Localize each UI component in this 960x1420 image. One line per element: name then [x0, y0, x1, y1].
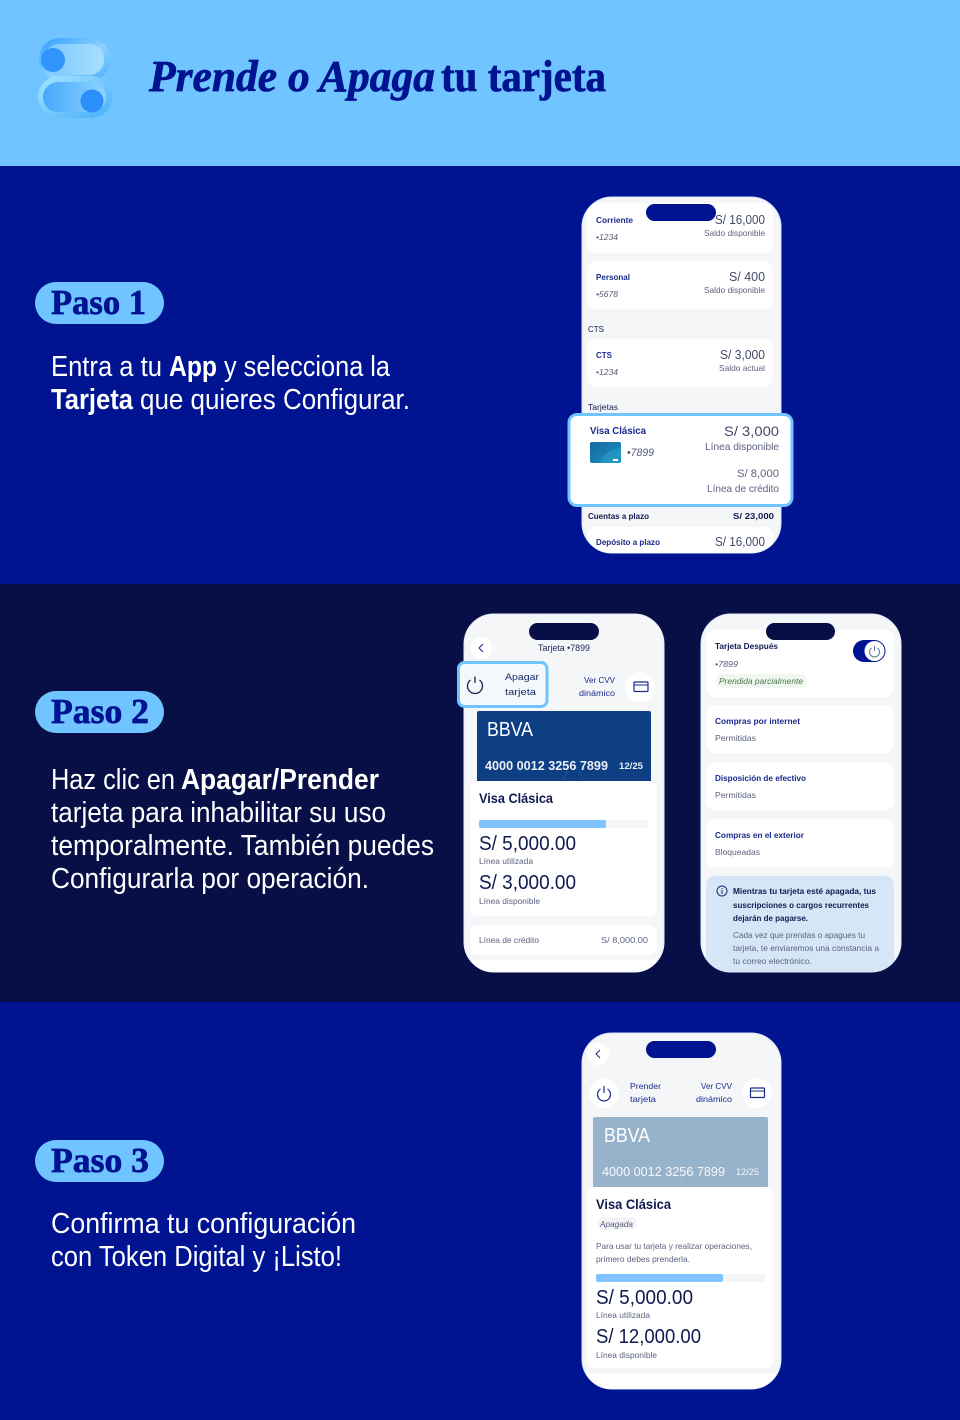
credit panel: Apagada	[599, 1220, 634, 1229]
title: tu tarjeta	[441, 52, 606, 101]
step 2 text: Apagar/Prender	[181, 764, 379, 796]
highlight: turn off card button	[458, 662, 547, 706]
setting: disposicion de efectivo: Disposición de efectivo	[715, 773, 806, 783]
credit panel: Línea utilizada	[596, 1310, 650, 1320]
step 2 text: Haz clic en	[51, 764, 175, 796]
bank card	[477, 711, 651, 783]
turn on button: Prender	[630, 1081, 661, 1091]
account: personal: Personal	[596, 272, 630, 282]
step 3 text: Confirma tu configuración	[51, 1208, 356, 1240]
row: cuentas a plazo: S/ 16,000	[715, 535, 765, 549]
card status: Prendida parcialmente	[719, 677, 804, 686]
CVV button: Ver CVV	[701, 1081, 732, 1091]
account: corriente: S/ 16,000	[715, 213, 765, 227]
highlight: selected card	[569, 414, 792, 506]
CVV button: dinámico	[579, 688, 615, 698]
icon: back	[587, 1043, 609, 1065]
setting: compras en el exterior: Bloqueadas	[715, 847, 760, 857]
step 2 text: temporalmente. También puedes	[51, 830, 434, 862]
toggle switch	[853, 640, 886, 662]
bank card: 4000 0012 3256 7899	[485, 759, 608, 773]
step 2 badge: Paso 2	[51, 692, 149, 731]
setting: compras en el exterior	[706, 819, 894, 867]
step 1 text: App	[169, 351, 217, 383]
credit line row: Línea de crédito	[479, 935, 539, 945]
phone: card off	[582, 1033, 781, 1390]
highlight: selected card: Visa Clásica	[590, 426, 646, 437]
step 1 text: Entra a tu	[51, 351, 162, 383]
row: cuentas a plazo: Cuentas a plazo	[588, 511, 649, 521]
highlight: selected card: Línea disponible	[705, 441, 779, 453]
setting: disposicion de efectivo: Permitidas	[715, 790, 756, 800]
setting: compras por internet	[706, 705, 894, 753]
phone: account list	[569, 197, 792, 567]
credit panel: Línea disponible	[596, 1350, 657, 1360]
credit panel	[587, 1187, 774, 1368]
callout: info notice: Cada vez que prendas o apagues tu	[733, 930, 865, 940]
phone: card detail: Tarjeta •7899	[538, 643, 590, 653]
account: CTS: Saldo actual	[719, 363, 765, 373]
credit panel: Visa Clásica	[596, 1197, 671, 1212]
icon: back	[470, 637, 492, 659]
highlight: turn off card button: Apagar	[505, 672, 539, 683]
account: personal: Saldo disponible	[704, 285, 765, 295]
highlight: selected card: S/ 8,000	[737, 468, 779, 480]
account: corriente: Corriente	[596, 215, 633, 225]
step 1 text: que quieres Configurar.	[140, 384, 410, 416]
phone: card settings	[701, 614, 901, 976]
account: CTS: •1234	[596, 368, 619, 377]
account: corriente: Saldo disponible	[704, 228, 765, 238]
account: CTS: CTS	[596, 350, 612, 360]
card status: Tarjeta Después	[715, 641, 778, 651]
step 3 badge: Paso 3	[51, 1141, 149, 1180]
credit panel: Línea disponible	[479, 896, 540, 906]
account: personal: •5678	[596, 290, 619, 299]
CVV button	[579, 672, 655, 702]
card status	[715, 641, 807, 688]
step 1 badge: Paso 1	[51, 283, 146, 322]
setting: compras por internet: Compras por internet	[715, 716, 800, 726]
setting: disposicion de efectivo	[706, 762, 894, 810]
credit panel: Línea utilizada	[479, 856, 533, 866]
title	[148, 52, 606, 101]
setting: compras en el exterior: Compras en el exterior	[715, 830, 805, 840]
credit panel	[470, 781, 657, 916]
callout: info notice: suscripciones o cargos recurrentes	[733, 900, 869, 910]
step 1 text	[51, 351, 410, 416]
credit line row	[479, 935, 648, 945]
account: CTS: CTS	[588, 324, 604, 334]
credit panel: primero debes prenderla.	[596, 1254, 690, 1264]
highlight: selected card: S/ 3,000	[724, 423, 779, 439]
CVV button: Ver CVV	[584, 675, 615, 685]
step 2 text	[51, 764, 434, 895]
step 2 badge	[35, 691, 164, 733]
row: cuentas a plazo: S/ 23,000	[733, 511, 774, 521]
phone: card detail	[458, 614, 664, 974]
panel: step 1	[35, 196, 794, 554]
account: corriente	[596, 213, 765, 242]
credit line row: S/ 8,000.00	[601, 935, 648, 945]
bank card: 12/25	[619, 761, 643, 771]
account: CTS: S/ 3,000	[720, 348, 765, 362]
panel: step 3	[35, 1032, 782, 1390]
bank card: disabled	[593, 1117, 768, 1189]
icon: toggle switches	[38, 38, 112, 118]
step 1 text: Tarjeta	[51, 384, 134, 416]
step 3 badge	[35, 1140, 164, 1182]
account: personal: S/ 400	[729, 270, 765, 284]
step 2 text: tarjeta para inhabilitar su uso	[51, 797, 386, 829]
CVV button	[696, 1078, 772, 1108]
credit panel: Para usar tu tarjeta y realizar operaciones,	[596, 1241, 752, 1251]
credit panel: S/ 5,000.00	[596, 1287, 693, 1309]
callout: info notice	[706, 876, 894, 976]
turn on button: tarjeta	[630, 1094, 656, 1104]
bank card: disabled: 12/25	[736, 1167, 759, 1177]
account: corriente: •1234	[596, 233, 619, 242]
icon: mini card	[590, 442, 621, 463]
step 2 text: Configurarla por operación.	[51, 863, 369, 895]
step 1 text: y selecciona la	[224, 351, 391, 383]
CVV button: dinámico	[696, 1094, 732, 1104]
bank card: disabled: 4000 0012 3256 7899	[602, 1165, 725, 1179]
credit panel: S/ 5,000.00	[479, 833, 576, 855]
callout: info notice: tu correo electrónico.	[733, 956, 812, 966]
credit panel: S/ 12,000.00	[596, 1326, 701, 1348]
bank card: BBVA	[487, 719, 534, 741]
account: personal	[596, 270, 765, 299]
step 3 text	[51, 1208, 356, 1273]
callout: info notice: Mientras tu tarjeta esté apagada, tus	[733, 886, 876, 896]
phone: account list: Tarjetas	[588, 402, 618, 412]
row: cuentas a plazo	[588, 511, 774, 549]
credit panel: S/ 3,000.00	[479, 872, 576, 894]
callout: info notice: dejarán de pagarse.	[733, 913, 808, 923]
highlight: selected card: •7899	[627, 447, 654, 459]
turn on button	[589, 1078, 661, 1108]
title: Prende o Apaga	[148, 52, 435, 101]
bank card: disabled: BBVA	[604, 1125, 651, 1147]
account: CTS	[588, 324, 765, 377]
step 1 badge	[35, 282, 164, 324]
header band	[0, 0, 960, 166]
card status: •7899	[715, 660, 739, 669]
highlight: turn off card button: tarjeta	[505, 687, 537, 698]
callout: info notice: tarjeta, te enviaremos una constancia a	[733, 943, 879, 953]
panel: step 2	[0, 584, 960, 1002]
step 3 text: con Token Digital y ¡Listo!	[51, 1241, 342, 1273]
credit panel: Visa Clásica	[479, 791, 553, 806]
row: cuentas a plazo: Depósito a plazo	[596, 537, 660, 547]
highlight: selected card: Línea de crédito	[707, 483, 779, 495]
setting: compras por internet: Permitidas	[715, 733, 756, 743]
